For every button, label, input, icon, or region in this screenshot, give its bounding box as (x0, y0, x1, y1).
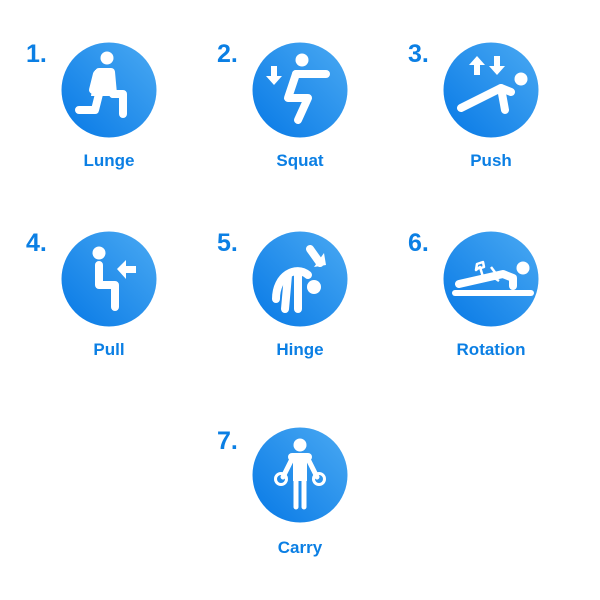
number 2: 2. (217, 40, 238, 68)
label: Squat (276, 151, 324, 170)
icon: rotation (444, 232, 538, 326)
item 7: Carry (217, 427, 348, 557)
label: Pull (93, 340, 125, 359)
item 5: Hinge (217, 229, 348, 359)
item 3: Push (408, 40, 538, 170)
number 4: 4. (26, 229, 47, 257)
icon: pull (62, 232, 156, 326)
item 6: Rotation (408, 229, 538, 359)
icon: lunge (62, 42, 156, 138)
number 7: 7. (217, 427, 238, 455)
label: Lunge (84, 151, 134, 170)
icon: squat (252, 42, 348, 138)
number 6: 6. (408, 229, 429, 257)
item 2: Squat (217, 40, 348, 170)
number 3: 3. (408, 40, 429, 68)
label: Carry (278, 538, 322, 557)
item 4: Pull (26, 229, 156, 359)
icon: push (444, 42, 538, 138)
label: Push (470, 151, 512, 170)
item 1: Lunge (26, 40, 156, 170)
number 5: 5. (217, 229, 238, 257)
label: Hinge (276, 340, 324, 359)
icon: hinge (252, 232, 348, 326)
number 1: 1. (26, 40, 47, 68)
icon: carry (252, 428, 348, 522)
label: Rotation (457, 340, 525, 359)
